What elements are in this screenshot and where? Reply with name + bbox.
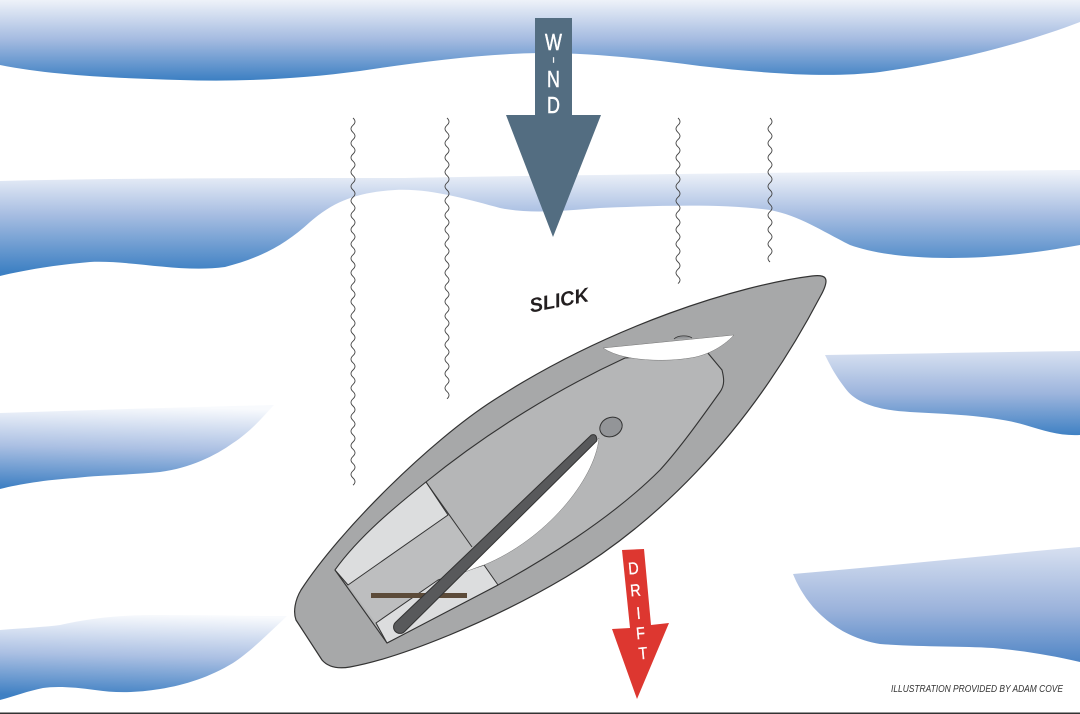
tiller [371,593,467,598]
water band: left middle [0,405,274,489]
water band: right middle [825,351,1080,435]
wind arrow: W [545,30,562,56]
port seat [335,482,448,585]
drift arrow: F [635,625,646,644]
jib [603,335,734,360]
boat [295,276,826,668]
forestay bump [674,336,692,339]
starboard seat [376,565,498,643]
wind arrow: I [553,57,554,65]
wind arrow: N [547,67,560,93]
water band: second [0,170,1080,276]
boom [394,435,597,633]
hull [295,276,826,668]
drift arrow: I [636,605,641,623]
wind arrow: D [547,93,560,119]
cockpit floor [348,515,484,623]
wavy wind lines [351,118,772,485]
drift arrow [612,549,669,699]
cockpit [335,352,724,643]
water band: right lower [793,547,1080,662]
water band: left lower [0,615,287,700]
mast [597,414,625,440]
drift arrow: R [630,582,642,601]
water band: top [0,0,1080,81]
slick label: SLICK [528,284,592,318]
mainsail [457,438,599,575]
drift arrow: D [628,560,640,579]
drift arrow: T [638,645,649,664]
thwart line [426,482,472,547]
wind arrow [506,18,601,237]
